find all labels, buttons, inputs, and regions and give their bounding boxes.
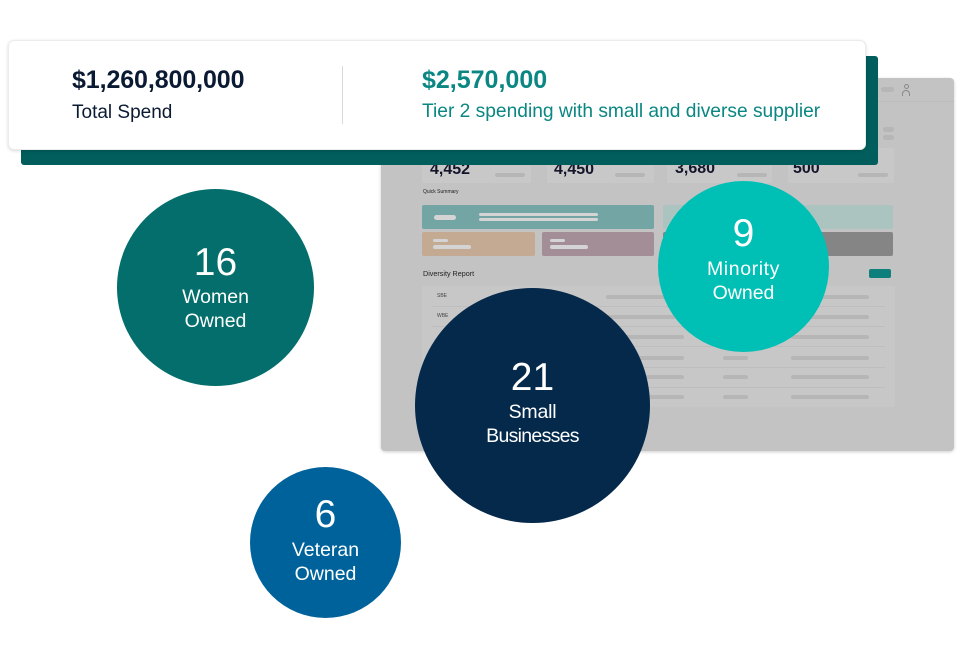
header rule <box>381 101 954 102</box>
summary tile: teal <box>422 205 654 229</box>
circle: veteran owned: 6 <box>315 493 336 536</box>
panel: dark teal backing card <box>21 56 878 165</box>
stat card 3: 3,680 <box>675 160 715 177</box>
circle: minority owned: 9 <box>733 212 754 255</box>
summary tile: mauve <box>542 232 654 256</box>
circle: small businesses: Small <box>509 401 556 423</box>
header placeholder bar lower <box>883 135 894 140</box>
panel: spend summary card <box>8 40 866 150</box>
table: diversity report: SBE <box>437 293 447 299</box>
total spend label: Total Spend <box>72 102 172 123</box>
stat card 4 <box>788 148 894 183</box>
total spend value: $1,260,800,000 <box>72 66 244 94</box>
stat card 1 <box>422 148 531 183</box>
summary tile: light teal <box>663 205 893 229</box>
stat card 1: 4,452 <box>430 161 470 178</box>
circle: minority owned <box>658 181 829 352</box>
circle: women owned <box>117 189 314 386</box>
circle: women owned: Women <box>182 286 249 308</box>
stat card 2 <box>547 148 654 183</box>
stat card 4: 500 <box>793 160 820 177</box>
table: diversity report <box>422 286 895 407</box>
table: diversity report: WBE <box>437 313 448 319</box>
circle: minority owned: Minority <box>707 258 780 280</box>
icon: user <box>902 84 910 96</box>
tier 2 label: Tier 2 spending with small and diverse supplier <box>422 101 820 122</box>
circle: minority owned: Owned <box>713 282 774 304</box>
circle: veteran owned: Veteran <box>292 539 359 561</box>
circle: women owned: 16 <box>194 241 237 284</box>
stat card 2: 4,450 <box>554 161 594 178</box>
circle: veteran owned <box>250 467 401 618</box>
header placeholder bar upper <box>883 127 894 132</box>
button <box>869 269 891 278</box>
heading: quick summary: Quick Summary <box>423 189 459 195</box>
circle: small businesses: Businesses <box>486 425 579 447</box>
tier 2 value: $2,570,000 <box>422 66 547 94</box>
circle: small businesses: 21 <box>511 356 554 399</box>
circle: veteran owned: Owned <box>295 563 356 585</box>
heading: diversity report: Diversity Report <box>423 269 474 278</box>
stat card 3 <box>667 148 772 183</box>
summary tile: orange <box>422 232 535 256</box>
divider <box>342 66 343 124</box>
summary tile: gray <box>663 232 893 256</box>
panel: dashboard screenshot <box>381 78 954 451</box>
circle: women owned: Owned <box>185 310 246 332</box>
circle: small businesses <box>415 288 650 523</box>
header bar placeholder <box>881 87 894 92</box>
